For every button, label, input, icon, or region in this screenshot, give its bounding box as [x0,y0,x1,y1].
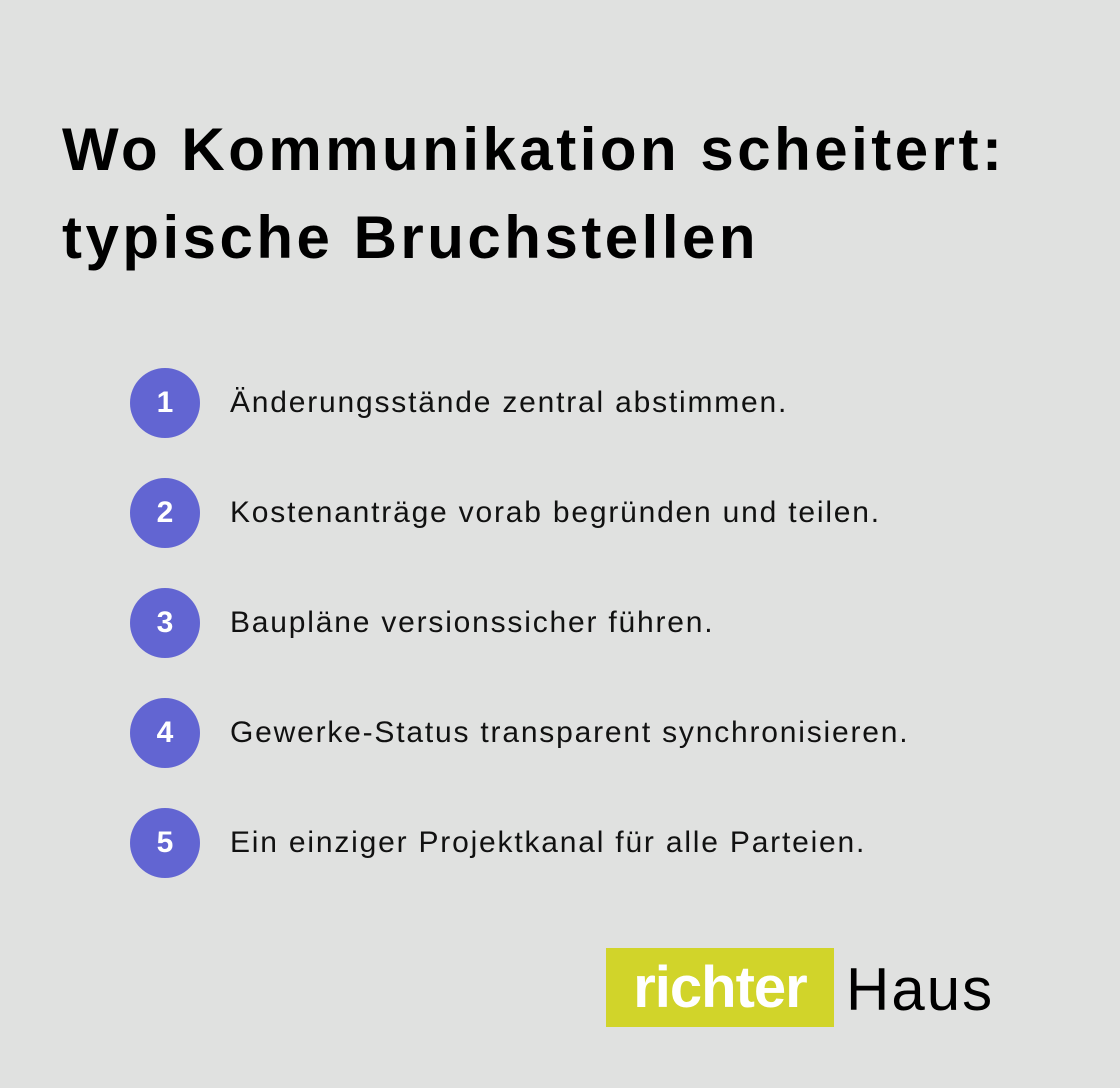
item 1: Änderungsstände zentral abstimmen. [230,386,788,419]
item 4: Gewerke-Status transparent synchronisieren. [230,716,909,749]
item 4: 4 [157,716,173,749]
logo: richter [633,955,807,1020]
item 4 [130,698,909,768]
item 5: Ein einziger Projektkanal für alle Parteien. [230,826,866,859]
logo [606,948,994,1027]
title [62,116,1005,271]
item 3: 3 [157,606,173,639]
item 2: 2 [157,496,173,529]
item 2 [130,478,881,548]
item 1 [130,368,788,438]
item 1: 1 [157,386,173,419]
item 2: Kostenanträge vorab begründen und teilen. [230,496,881,529]
title: Wo Kommunikation scheitert: [62,116,1005,183]
logo: Haus [846,956,994,1023]
title: typische Bruchstellen [62,204,759,271]
item 3 [130,588,714,658]
item 3: Baupläne versionssicher führen. [230,606,714,639]
item 5: 5 [157,826,173,859]
item 5 [130,808,866,878]
